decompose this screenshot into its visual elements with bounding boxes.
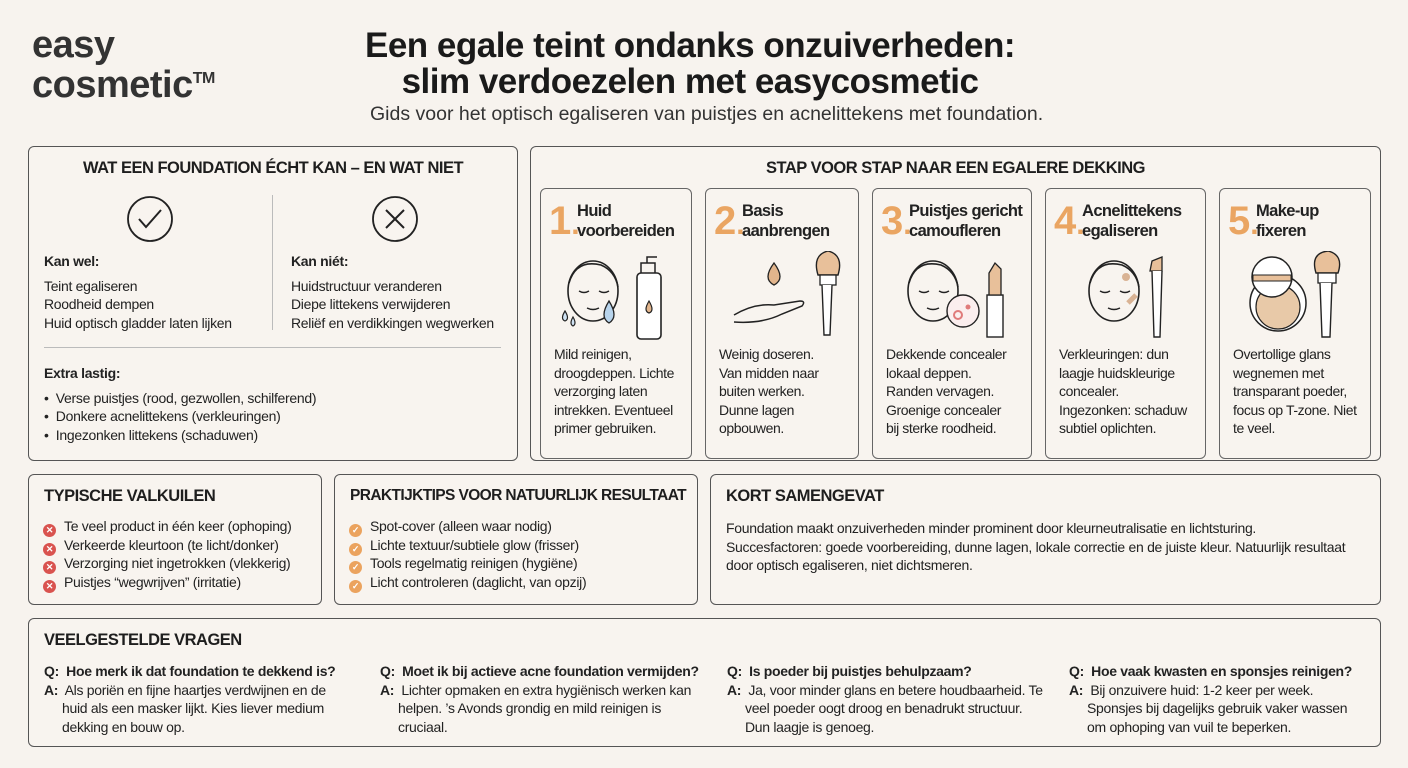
- heading: KORT SAMENGEVAT: [726, 487, 884, 505]
- step 5 text: Overtollige glans wegnemen met transparant poeder, focus op T-zone. Niet te veel.: [1233, 346, 1357, 436]
- heading: TYPISCHE VALKUILEN: [44, 487, 215, 505]
- text: kan niet: Kan niét: Huidstructuur veranderen: [291, 253, 442, 294]
- faq 1: A: Als poriën en fijne haartjes verdwijnen en de huid als een masker lijkt. Kies liever medium dekking en bouw op.: [44, 682, 326, 734]
- heading: STAP VOOR STAP NAAR EEN EGALERE DEKKING: [766, 159, 1145, 177]
- step 1: voorbereiden: [577, 222, 674, 240]
- faq 4: A: Bij onzuivere huid: 1-2 keer per week. Sponsjes bij dagelijks gebruik vaker wassen om ophoping van vuil te beperken.: [1069, 682, 1347, 734]
- list: ✓: [352, 544, 359, 554]
- text: kan wel: Roodheid dempen: [44, 296, 154, 312]
- text: extra lastig: Extra lastig: • Verse puistjes (rood, gezwollen, schilferend): [44, 365, 316, 406]
- list: Lichte textuur/subtiele glow (frisser): [370, 536, 579, 552]
- text: kan wel: [44, 253, 232, 331]
- list: ✓: [352, 562, 359, 572]
- list: ✕: [46, 525, 53, 535]
- step 2: aanbrengen: [742, 222, 830, 240]
- step 2: [705, 188, 859, 459]
- panel: praktijktips: [334, 474, 698, 605]
- list: [349, 518, 586, 593]
- faq 3: Q: Is poeder bij puistjes behulpzaam?: [727, 663, 972, 679]
- text: kan niet: Reliëf en verdikkingen wegwerken: [291, 314, 494, 330]
- step 3: Puistjes gericht: [909, 202, 1022, 220]
- step 1: 1.: [549, 199, 580, 243]
- step 4 text: Verkleuringen: dun laagje huidskleurige concealer. Ingezonken: schaduw subtiel oplichten.: [1059, 346, 1187, 436]
- list: ✕: [46, 544, 53, 554]
- step 2: 2.: [714, 199, 745, 243]
- list: Spot-cover (alleen waar nodig): [370, 518, 552, 534]
- step 1 text: Mild reinigen, droogdeppen. Lichte verzorging laten intrekken. Eventueel primer gebruiken.: [554, 346, 674, 436]
- step 1: Huid: [577, 202, 611, 220]
- step 1: [540, 188, 692, 459]
- list: ✓: [352, 525, 359, 535]
- step 4: egaliseren: [1082, 222, 1158, 240]
- faq 4: Q: Hoe vaak kwasten en sponsjes reinigen?: [1069, 663, 1352, 679]
- step 3: camoufleren: [909, 222, 1001, 240]
- list: ✕: [46, 562, 53, 572]
- text: extra lastig: • Donkere acnelittekens (verkleuringen): [44, 408, 280, 424]
- step 3 text: Dekkende concealer lokaal deppen. Randen vervagen. Groenige concealer bij sterke roodheid.: [886, 346, 1006, 436]
- logo: cosmeticTM: [32, 64, 215, 106]
- text: kan wel: Huid optisch gladder laten lijken: [44, 314, 232, 330]
- panel: valkuilen: [28, 474, 322, 605]
- logo: easy: [32, 24, 115, 66]
- faq 2: A: Lichter opmaken en extra hygiënisch werken kan helpen. ’s Avonds grondig en mild reinigen is cruciaal.: [380, 682, 691, 734]
- text: extra lastig: [44, 365, 316, 443]
- title: slim verdoezelen met easycosmetic: [402, 62, 978, 101]
- title: Een egale teint ondanks onzuiverheden:: [365, 26, 1015, 65]
- step 5: [1219, 188, 1371, 459]
- panel: stap voor stap: [530, 146, 1381, 461]
- step 3: 3.: [881, 199, 912, 243]
- step 5: Make-up: [1256, 202, 1319, 220]
- logo: [32, 24, 215, 106]
- heading: VEELGESTELDE VRAGEN: [44, 631, 242, 649]
- text: kan wel: Kan wel: Teint egaliseren: [44, 253, 137, 294]
- text: kan niet: Diepe littekens verwijderen: [291, 296, 450, 312]
- text: [726, 520, 1346, 573]
- step 5: 5.: [1228, 199, 1259, 243]
- step 5: fixeren: [1256, 222, 1306, 240]
- step 2 text: Weinig doseren. Van midden naar buiten werken. Dunne lagen opbouwen.: [719, 346, 819, 436]
- text: extra lastig: • Ingezonken littekens (schaduwen): [44, 426, 258, 442]
- step 3: [872, 188, 1032, 459]
- faq 1: Q: Hoe merk ik dat foundation te dekkend is?: [44, 663, 335, 679]
- list: ✓: [352, 580, 359, 590]
- list: Puistjes “wegwrijven” (irritatie): [64, 574, 241, 590]
- step 4: Acnelittekens: [1082, 202, 1182, 220]
- step 2: Basis: [742, 202, 783, 220]
- panel: FAQ: [28, 618, 1381, 747]
- step 4: 4.: [1054, 199, 1085, 243]
- text: kan niet: [291, 253, 494, 331]
- text: Foundation maakt onzuiverheden minder prominent door kleurneutralisatie en lichtsturing.: [726, 520, 1256, 536]
- text: Succesfactoren: goede voorbereiding, dunne lagen, lokale correctie en de juiste kleur. Natuurlijk resultaat door optisch egaliseren, niet dichtsmeren.: [726, 538, 1345, 573]
- faq 3: A: Ja, voor minder glans en betere houdbaarheid. Te veel poeder oogt droog en benadrukt structuur. Dun laagje is genoeg.: [727, 682, 1043, 734]
- list: Te veel product in één keer (ophoping): [64, 518, 292, 534]
- list: Licht controleren (daglicht, van opzij): [370, 574, 586, 590]
- list: [43, 518, 292, 593]
- step 4: [1045, 188, 1206, 459]
- icon: cross: [372, 196, 418, 242]
- title: [365, 26, 1015, 101]
- list: Tools regelmatig reinigen (hygiëne): [370, 555, 577, 571]
- panel: wat foundation kan: [28, 146, 518, 461]
- subtitle: Gids voor het optisch egaliseren van puistjes en acnelittekens met foundation.: [370, 103, 1043, 125]
- faq 2: Q: Moet ik bij actieve acne foundation vermijden?: [380, 663, 699, 679]
- heading: WAT EEN FOUNDATION ÉCHT KAN – EN WAT NIET: [83, 159, 463, 177]
- heading: PRAKTIJKTIPS VOOR NATUURLIJK RESULTAAT: [350, 487, 686, 504]
- icon: check: [127, 196, 173, 242]
- list: Verzorging niet ingetrokken (vlekkerig): [64, 555, 290, 571]
- list: ✕: [46, 580, 53, 590]
- panel: kort samengevat: [710, 474, 1381, 605]
- list: Verkeerde kleurtoon (te licht/donker): [64, 536, 279, 552]
